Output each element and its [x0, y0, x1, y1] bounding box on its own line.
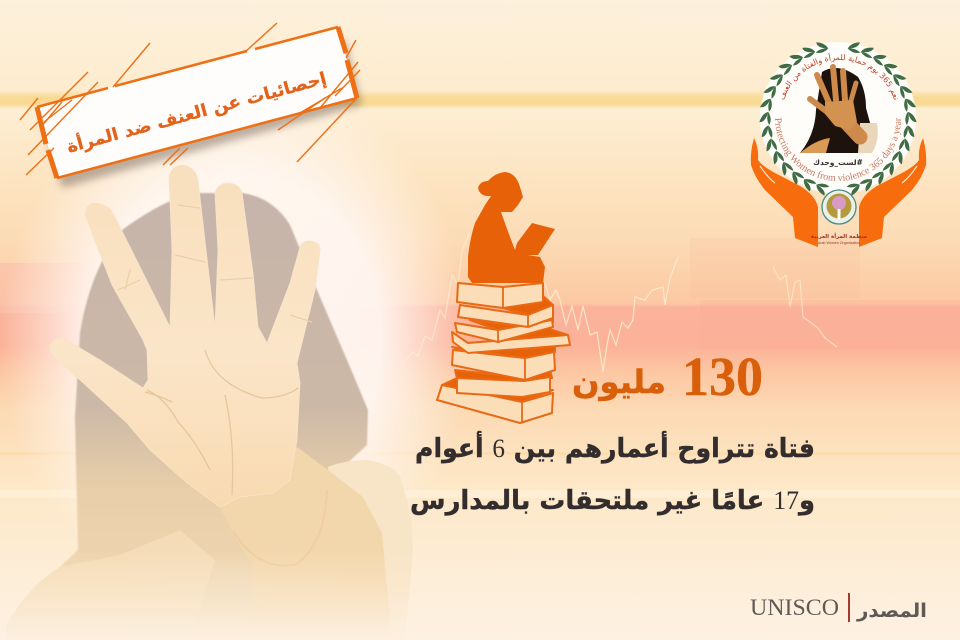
laurel wreath [759, 41, 917, 196]
shoulders [8, 530, 214, 622]
book stack [437, 283, 570, 423]
logo hands [751, 138, 926, 247]
logo photo [800, 67, 878, 153]
diagonal hatch lines [20, 23, 360, 175]
unit: مليون [572, 363, 666, 401]
bottom book dark top [442, 378, 553, 402]
book 5 [452, 345, 555, 358]
description text [410, 431, 815, 516]
book spines [498, 287, 528, 423]
logo hashtag: #لست_وحدك [813, 158, 863, 167]
logo white disc [760, 42, 916, 194]
statistic: 130 million [572, 346, 763, 407]
book 2 [503, 296, 553, 315]
banner shadow [42, 40, 362, 188]
photo: woman with raised hand [5, 165, 413, 640]
palm creases [145, 350, 298, 495]
banner card [37, 27, 357, 178]
source credit [750, 593, 927, 622]
sleeve [328, 460, 413, 610]
logo emblem: منظمة المرأة العربية [811, 232, 867, 240]
source name: UNISCO [750, 595, 839, 620]
logo curved text: نعم 365 يوم حماية للمرأة والفتاة من العنف [782, 52, 898, 100]
logo emblem: Arab Women Organization [818, 241, 860, 245]
title banner [20, 23, 362, 188]
line 1: فتاة تتراوح أعمارهم بين 6 أعوام [415, 431, 815, 464]
book 6 [455, 370, 552, 382]
top book [457, 283, 543, 308]
logo emblem [811, 190, 867, 245]
logo: protecting women: Protecting Women from violence 365 days a year [775, 118, 902, 181]
banner frame [20, 23, 360, 178]
right hand [50, 165, 320, 507]
number: 130 [682, 346, 763, 407]
forearm [220, 447, 389, 612]
icon: girl reading on books [437, 172, 570, 423]
pale stock line [398, 232, 470, 372]
logo: protecting women [750, 42, 926, 247]
girl silhouette [468, 172, 555, 283]
line 2: و17 عامًا غير ملتحقات بالمدارس [410, 486, 815, 516]
banner heading: إحصائيات عن العنف ضد المرأة [64, 67, 329, 158]
book 3 [470, 318, 553, 330]
hair [60, 193, 368, 640]
book 4 [468, 327, 568, 343]
source label: المصدر [856, 600, 927, 622]
source divider [848, 593, 850, 622]
